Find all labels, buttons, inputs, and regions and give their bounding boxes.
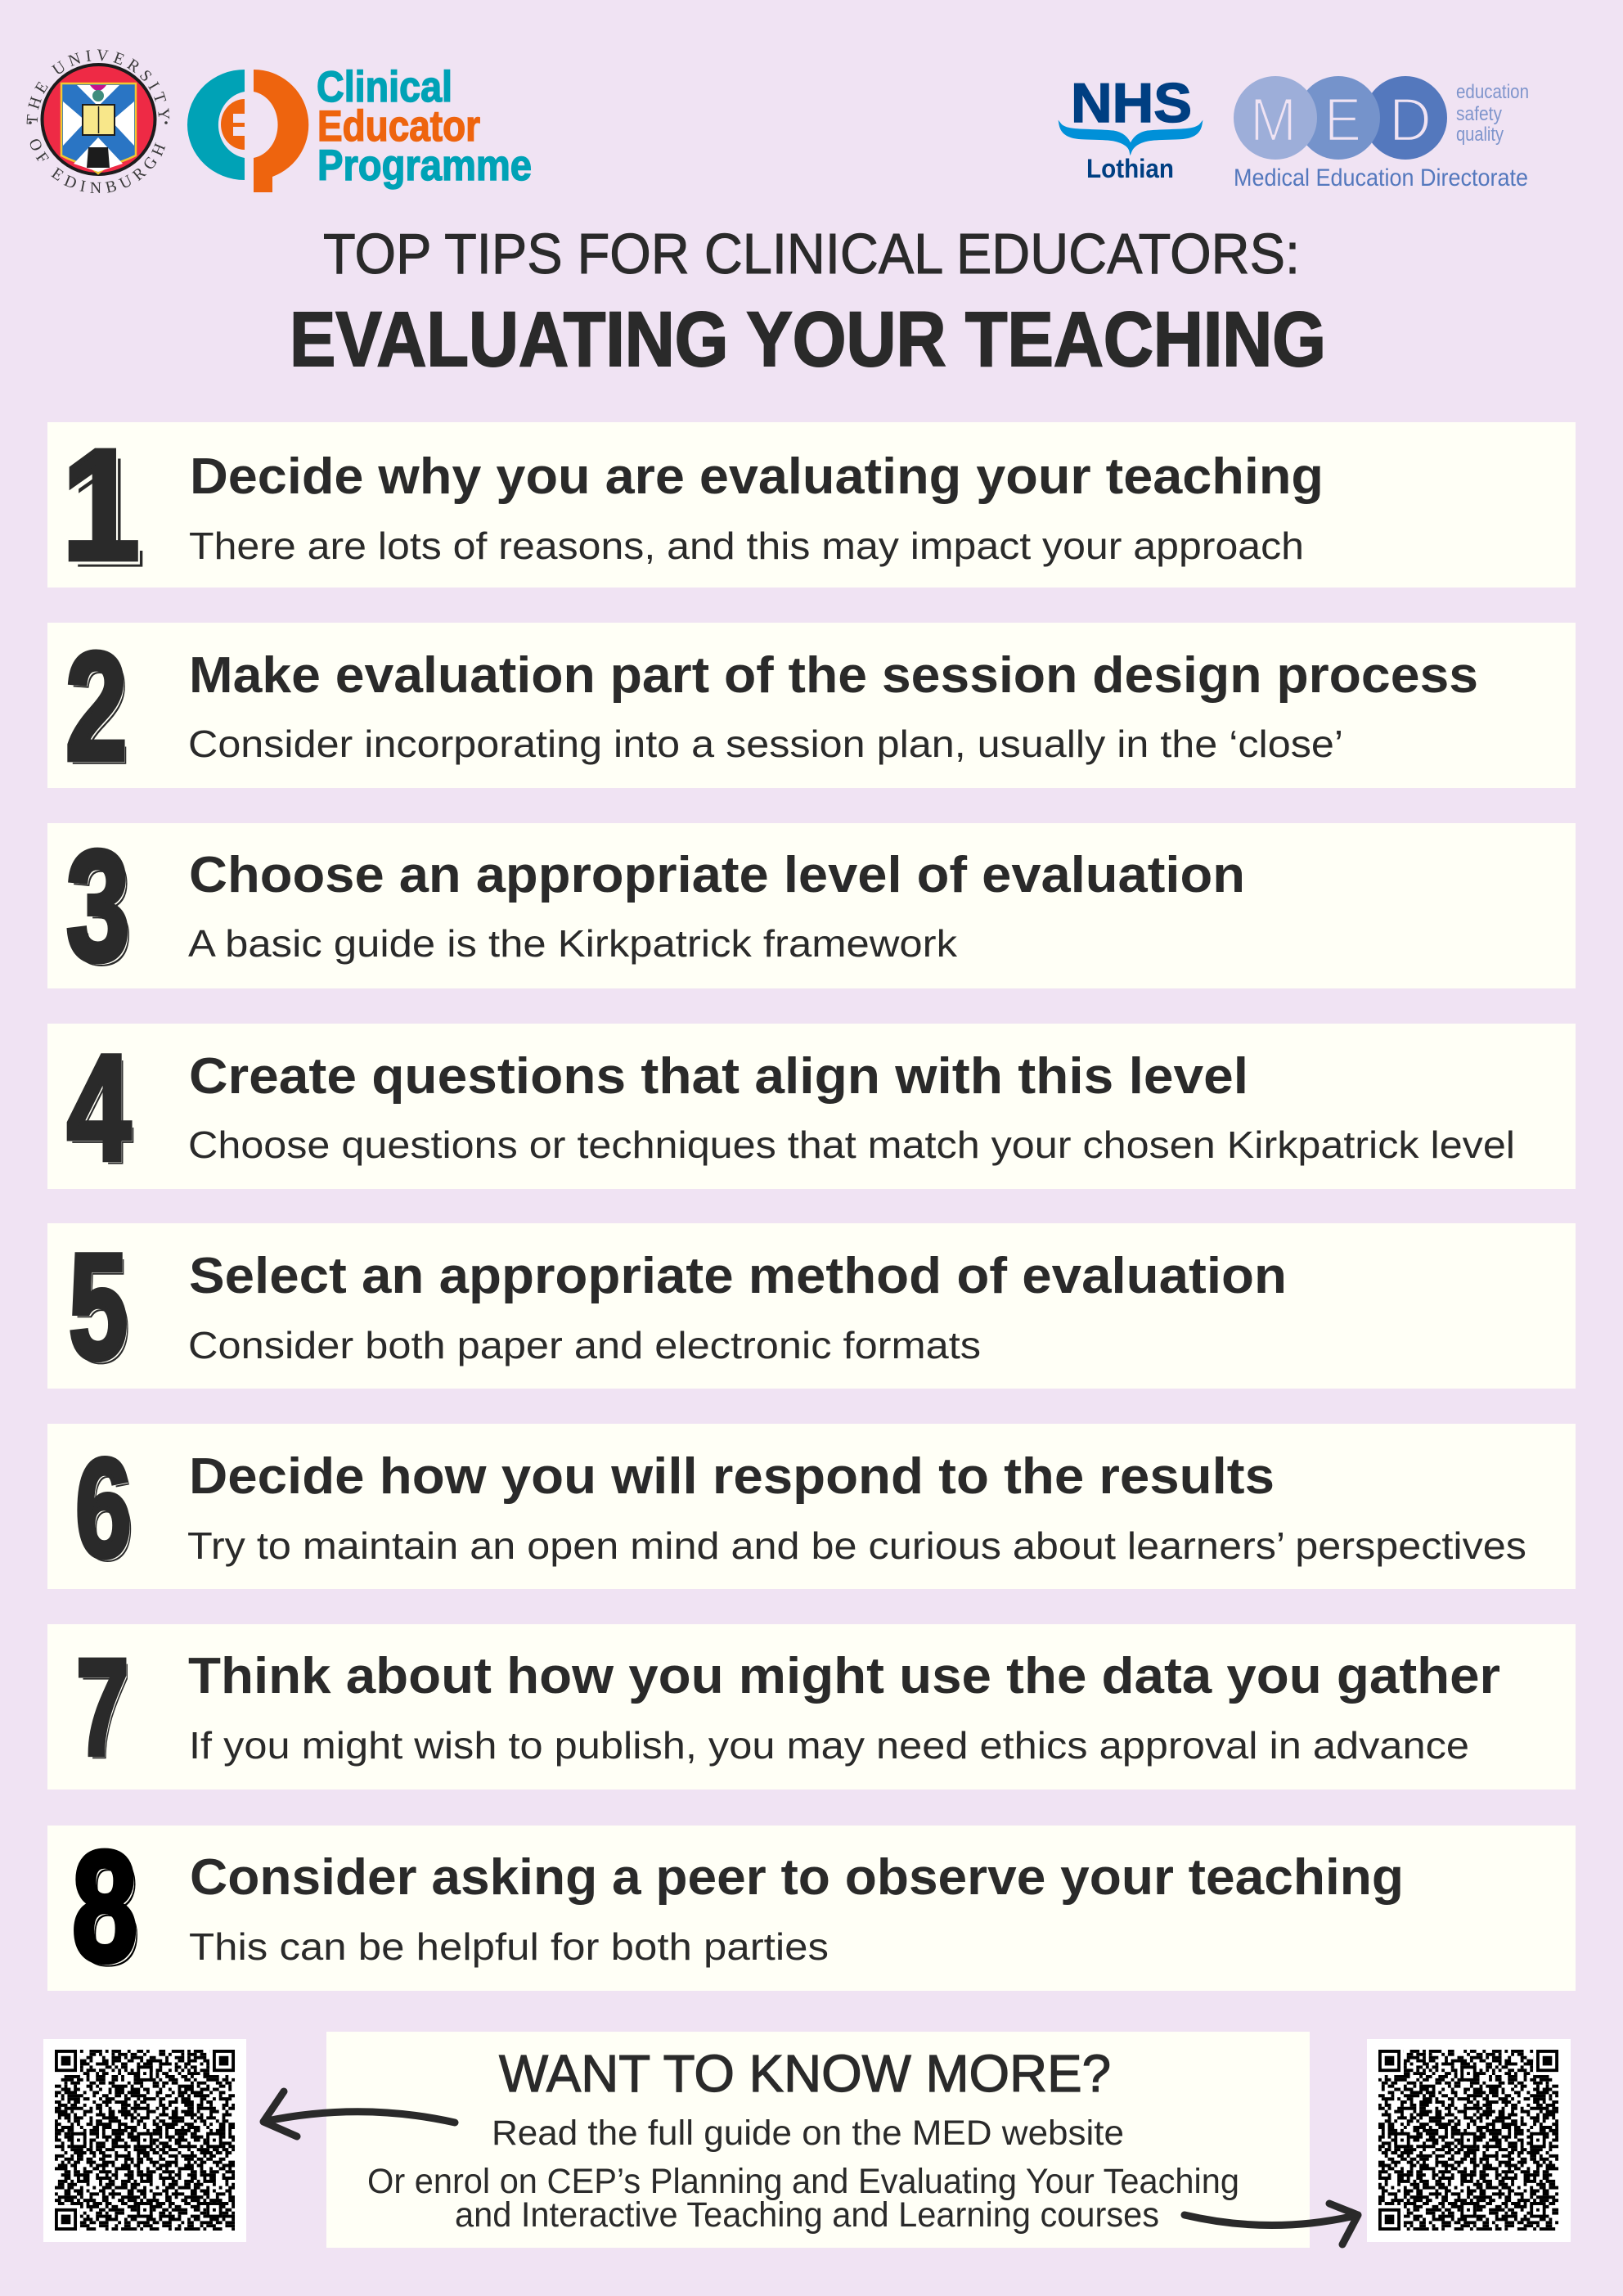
title line 2: EVALUATING YOUR TEACHING xyxy=(290,296,1326,383)
call to action text xyxy=(367,2044,1239,2235)
header logos xyxy=(26,49,1529,193)
tip 8 text xyxy=(189,1849,1404,1968)
logo: Medical Education Directorate: M xyxy=(1250,85,1297,154)
number 6: 6 xyxy=(75,1429,132,1587)
logo: Medical Education Directorate: education xyxy=(1456,81,1529,103)
number 2: 2 xyxy=(65,621,128,792)
crest text ring xyxy=(26,49,170,193)
number 4: 4 xyxy=(67,1024,131,1192)
logo: Medical Education Directorate: safety xyxy=(1456,103,1502,125)
logo: Clinical Educator Programme xyxy=(187,63,532,192)
tip 1 description: There are lots of reasons, and this may impact your approach xyxy=(189,524,1304,567)
number 3: 3 xyxy=(66,818,130,993)
number 1: 1 xyxy=(62,417,140,592)
tip 3 description: A basic guide is the Kirkpatrick framework xyxy=(188,922,958,965)
tip 1 text xyxy=(189,448,1324,567)
logo wordmark: Programme xyxy=(317,142,532,190)
crest red oval xyxy=(43,65,155,174)
tip 7 description: If you might wish to publish, you may need ethics approval in advance xyxy=(189,1724,1469,1767)
panel: tip 6 xyxy=(47,1424,1576,1589)
courses line 1: Or enrol on CEP’s Planning and Evaluating Your Teaching xyxy=(367,2162,1239,2201)
logo: Medical Education Directorate xyxy=(1234,76,1529,191)
tip 4 text xyxy=(188,1048,1515,1166)
logo: Medical Education Directorate: E xyxy=(1324,85,1361,154)
number 8: 8 xyxy=(72,1819,137,1994)
number 5: 5 xyxy=(69,1222,128,1391)
panel: tip 3 xyxy=(47,823,1576,988)
tip 5 description: Consider both paper and electronic formats xyxy=(188,1324,981,1366)
tip 6 heading: Decide how you will respond to the results xyxy=(189,1448,1275,1505)
tip 8 heading: Consider asking a peer to observe your teaching xyxy=(190,1849,1404,1906)
call to action heading: WANT TO KNOW MORE? xyxy=(499,2044,1111,2103)
courses line 2: and Interactive Teaching and Learning courses xyxy=(455,2195,1159,2235)
tip 2 heading: Make evaluation part of the session design process xyxy=(189,647,1478,704)
tip 2 text xyxy=(188,647,1478,765)
logo wordmark xyxy=(317,63,532,190)
logo: NHS Lothian: Lothian xyxy=(1086,154,1174,183)
number 7: 7 xyxy=(76,1631,129,1784)
logo: Medical Education Directorate: quality xyxy=(1456,124,1504,146)
title block xyxy=(290,222,1326,383)
logo wordmark: Educator xyxy=(317,102,480,151)
logo: NHS Lothian: NHS xyxy=(1071,72,1192,134)
panel: tip 4 xyxy=(47,1024,1576,1189)
tip 5 text xyxy=(188,1248,1287,1366)
tip 7 heading: Think about how you might use the data you gather xyxy=(188,1648,1500,1704)
tip 2 description: Consider incorporating into a session plan, usually in the ‘close’ xyxy=(188,723,1343,765)
arrow: to right QR code xyxy=(1181,2199,1361,2249)
crest text ring: THE UNIVERSITY xyxy=(26,49,170,124)
tip 1 heading: Decide why you are evaluating your teaching xyxy=(190,448,1324,505)
crest shield xyxy=(61,83,136,173)
title line 1: TOP TIPS FOR CLINICAL EDUCATORS: xyxy=(323,222,1300,286)
logo: Medical Education Directorate: D xyxy=(1389,85,1432,154)
panel: tip 7 xyxy=(47,1624,1576,1790)
tip 7 text xyxy=(188,1648,1500,1767)
logo: NHS Lothian xyxy=(1060,72,1201,183)
QR code: CEP courses xyxy=(1367,2039,1571,2242)
guide line: Read the full guide on the MED website xyxy=(492,2114,1124,2153)
tip 6 description: Try to maintain an open mind and be curious about learners’ perspectives xyxy=(187,1524,1526,1567)
panel: tip 2 xyxy=(47,623,1576,788)
tip 3 heading: Choose an appropriate level of evaluation xyxy=(189,847,1245,903)
tip 8 description: This can be helpful for both parties xyxy=(189,1925,829,1968)
panel: tip 8 xyxy=(47,1826,1576,1991)
logo: Medical Education Directorate: Medical Education Directorate xyxy=(1234,164,1528,191)
arrow: to left QR code xyxy=(260,2088,458,2141)
tip 3 text xyxy=(188,847,1245,965)
logo mark xyxy=(187,70,308,192)
panel: tip 5 xyxy=(47,1223,1576,1389)
logo: University of Edinburgh xyxy=(26,49,170,193)
tip 4 heading: Create questions that align with this level xyxy=(189,1048,1248,1105)
logo wordmark: Clinical xyxy=(317,63,452,111)
tip 5 heading: Select an appropriate method of evaluation xyxy=(189,1248,1287,1304)
panel: tip 1 xyxy=(47,422,1576,588)
tip 6 text xyxy=(187,1448,1526,1567)
tip 4 description: Choose questions or techniques that match your chosen Kirkpatrick level xyxy=(188,1123,1515,1166)
panel: want to know more xyxy=(326,2032,1310,2248)
QR code: MED website xyxy=(43,2039,246,2242)
crest text ring: OF EDINBURGH xyxy=(29,139,165,193)
